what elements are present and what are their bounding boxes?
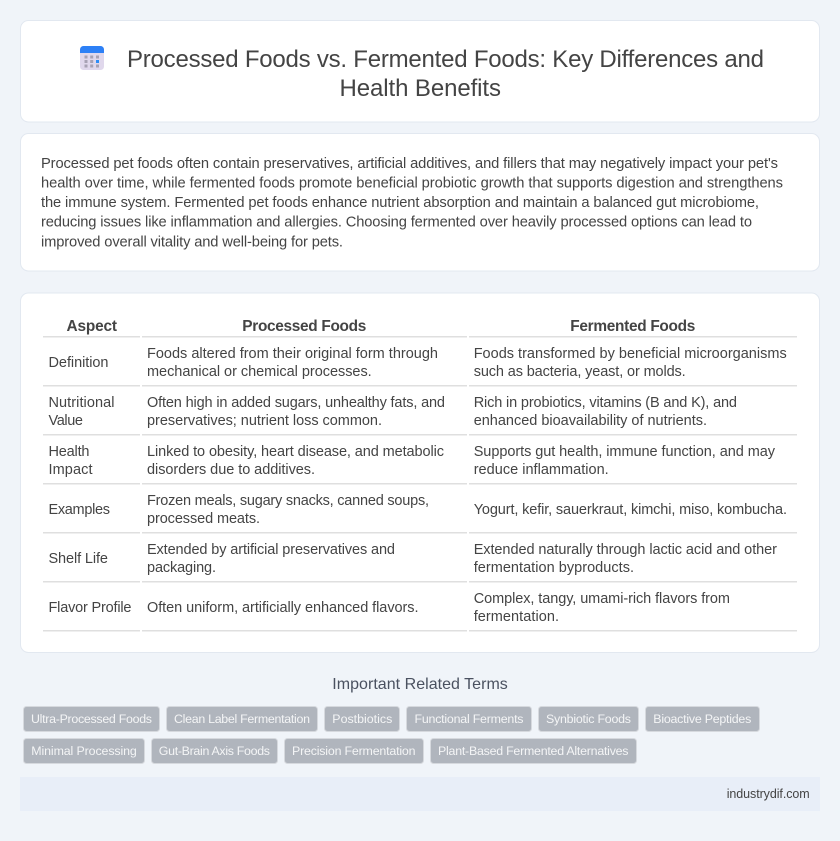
table row: health impact xyxy=(43,444,797,484)
tag: Functional Ferments: Functional Ferments xyxy=(414,712,524,726)
table header: Fermented Foods xyxy=(570,318,695,335)
tag: Precision Fermentation xyxy=(284,738,424,764)
table row: definition: mechanical or chemical processes. xyxy=(147,364,372,380)
table row: nutritional value: Often high in added sugars, unhealthy fats, and xyxy=(147,395,445,411)
tag: Clean Label Fermentation: Clean Label Fermentation xyxy=(174,712,310,726)
text block: introduction paragraph: Processed pet foods often contain preservatives, artificial additives, and fillers that may negatively impact your pet's xyxy=(41,156,778,172)
table row: nutritional value: Nutritional xyxy=(48,395,114,411)
table row: health impact: Impact xyxy=(48,462,92,478)
text block: introduction paragraph: improved overall vitality and well-being for pets. xyxy=(41,234,343,250)
table row: examples: Examples xyxy=(48,502,110,518)
tag: Synbiotic Foods xyxy=(538,706,638,732)
table row: definition xyxy=(43,346,797,386)
tag: Plant-Based Fermented Alternatives xyxy=(430,738,636,764)
table row: nutritional value: preservatives; nutrient loss common. xyxy=(147,413,382,429)
table row: flavor profile: Often uniform, artificially enhanced flavors. xyxy=(147,600,418,616)
table row: nutritional value xyxy=(43,395,797,436)
tag: Precision Fermentation: Precision Fermentation xyxy=(292,744,416,758)
tag: Gut-Brain Axis Foods: Gut-Brain Axis Foods xyxy=(159,744,270,758)
footer xyxy=(20,777,820,811)
table row: shelf life xyxy=(43,542,797,582)
table row: shelf life: Shelf Life xyxy=(48,551,108,567)
table row: nutritional value: Value xyxy=(48,413,83,429)
tag: Postbiotics: Postbiotics xyxy=(332,712,392,726)
tag: Minimal Processing xyxy=(24,738,144,764)
table row: definition: such as bacteria, yeast, or molds. xyxy=(474,364,686,380)
footer: industrydif.com xyxy=(727,787,810,801)
text block: introduction paragraph: health over time, while fermented foods promote beneficial probiotic growth that supports digestion and strengthens xyxy=(41,176,783,192)
table row: nutritional value: Rich in probiotics, vitamins (B and K), and xyxy=(474,395,737,411)
icon: calendar xyxy=(80,46,104,70)
table row: flavor profile xyxy=(43,591,797,632)
table row: examples: Yogurt, kefir, sauerkraut, kimchi, miso, kombucha. xyxy=(474,502,787,518)
table row: nutritional value: enhanced bioavailability of nutrients. xyxy=(474,413,707,429)
table header: Aspect xyxy=(66,318,117,335)
table row: shelf life: Extended naturally through lactic acid and other xyxy=(474,542,777,558)
panel: comparison table xyxy=(20,293,820,652)
table header xyxy=(43,318,797,338)
text block: introduction paragraph: the immune system. Fermented pet foods enhance nutrient absorption and maintain a balanced gut microbiome, xyxy=(41,195,759,211)
heading: important related terms: Important Related Terms xyxy=(332,676,508,693)
table row: shelf life: packaging. xyxy=(147,560,216,576)
tag: Plant-Based Fermented Alternatives: Plant-Based Fermented Alternatives xyxy=(438,744,628,758)
tag: Bioactive Peptides xyxy=(646,706,760,732)
tag: Gut-Brain Axis Foods xyxy=(152,738,278,764)
table row: definition: Definition xyxy=(48,355,108,371)
text block: introduction paragraph xyxy=(41,156,783,250)
table row: examples: Frozen meals, sugary snacks, canned soups, xyxy=(147,493,429,509)
panel: title header xyxy=(20,20,820,122)
tag: Bioactive Peptides: Bioactive Peptides xyxy=(653,712,751,726)
table row: health impact: disorders due to additives. xyxy=(147,462,315,478)
table row: examples xyxy=(43,493,797,534)
panel: introduction xyxy=(20,134,820,271)
table row: definition: Foods altered from their original form through xyxy=(147,346,438,362)
table row: definition: Foods transformed by beneficial microorganisms xyxy=(474,346,787,362)
tag: Clean Label Fermentation xyxy=(166,706,318,732)
tag: Ultra-Processed Foods xyxy=(24,706,160,732)
table row: health impact: Health xyxy=(48,444,90,460)
table row: examples: processed meats. xyxy=(147,511,260,527)
table row: shelf life: fermentation byproducts. xyxy=(474,560,634,576)
text block: introduction paragraph: reducing issues like inflammation and allergies. Choosing fermented over heavily processed options can lead to xyxy=(41,215,752,231)
table row: health impact: Supports gut health, immune function, and may xyxy=(474,444,776,460)
table row: flavor profile: fermentation. xyxy=(474,609,559,625)
tag: Synbiotic Foods: Synbiotic Foods xyxy=(546,712,631,726)
table row: shelf life: Extended by artificial preservatives and xyxy=(147,542,395,558)
tag: Functional Ferments xyxy=(406,706,532,732)
panel: related term tags xyxy=(24,706,760,764)
tag: Ultra-Processed Foods: Ultra-Processed Foods xyxy=(31,712,152,726)
table row: health impact: Linked to obesity, heart disease, and metabolic xyxy=(147,444,444,460)
title xyxy=(127,46,764,102)
tag: Minimal Processing: Minimal Processing xyxy=(31,744,137,758)
table row: flavor profile: Complex, tangy, umami-rich flavors from xyxy=(474,591,730,607)
title: Health Benefits xyxy=(340,75,501,102)
table row: health impact: reduce inflammation. xyxy=(474,462,609,478)
table header: Processed Foods xyxy=(242,318,366,335)
tag: Postbiotics xyxy=(324,706,400,732)
table row: flavor profile: Flavor Profile xyxy=(48,600,132,616)
title: Processed Foods vs. Fermented Foods: Key Differences and xyxy=(127,46,764,73)
